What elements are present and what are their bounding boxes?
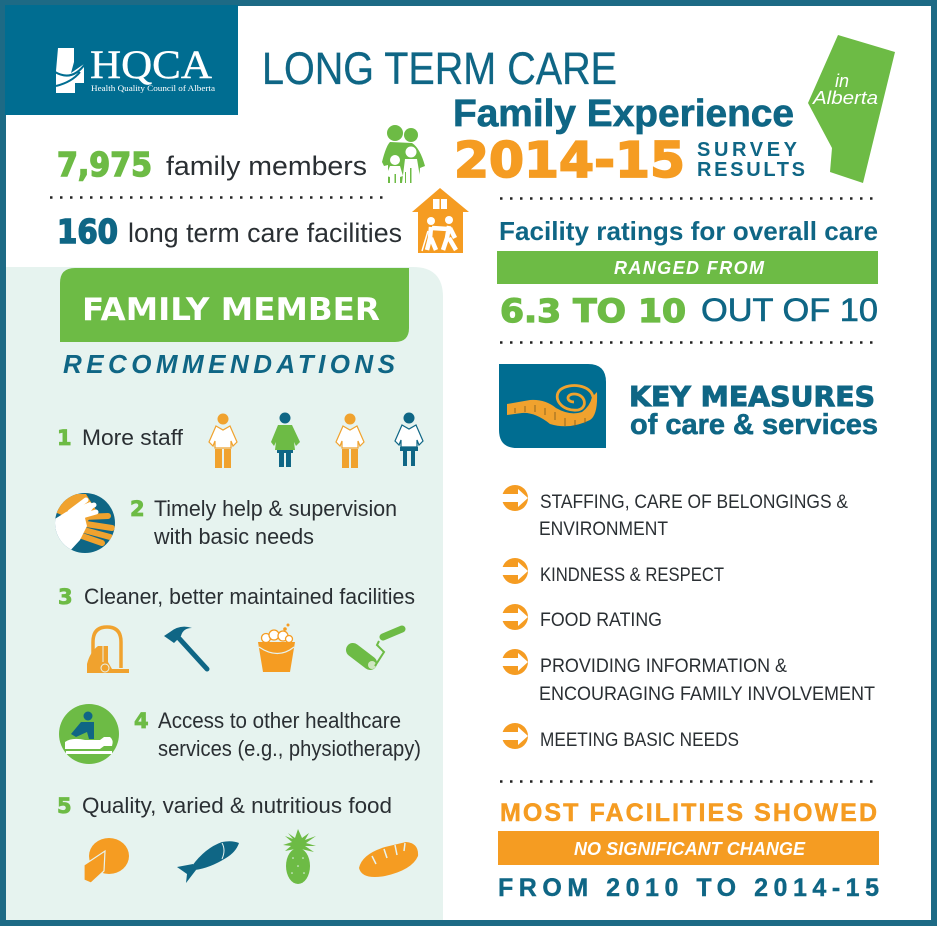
subtitle: Family Experience xyxy=(453,93,794,135)
icon: care home xyxy=(412,188,469,253)
title xyxy=(262,43,805,189)
recommendation 1: More staff xyxy=(82,425,184,450)
stat: rating range xyxy=(500,292,878,330)
heading: recommendations: RECOMMENDATIONS xyxy=(63,349,396,379)
recommendation 4 xyxy=(134,708,421,761)
panel: recommendations background xyxy=(6,267,443,920)
banner: ranged from: RANGED FROM xyxy=(614,258,765,278)
item: staffing xyxy=(502,485,848,540)
recommendation 3: 3 xyxy=(58,585,73,609)
stat: facilities: long term care facilities xyxy=(128,218,402,248)
banner: ranged from xyxy=(497,251,878,284)
banner: no significant change xyxy=(498,831,879,865)
item: food: FOOD RATING xyxy=(540,609,662,631)
logo wordmark: HQCA xyxy=(90,42,212,87)
recommendation 4: services (e.g., physiotherapy) xyxy=(158,736,421,761)
icon: Alberta map xyxy=(808,35,895,183)
heading: key measures xyxy=(629,380,878,441)
title: LONG TERM CARE xyxy=(262,43,617,94)
survey results: SURVEY xyxy=(697,139,798,161)
list: key measures xyxy=(502,485,875,751)
icon: helping hands xyxy=(50,493,115,553)
item: kindness xyxy=(502,558,724,586)
icon: hammer xyxy=(164,627,207,669)
icon: pineapple xyxy=(283,829,316,884)
icon: bread xyxy=(359,842,418,877)
heading: key measures: KEY MEASURES xyxy=(629,380,875,413)
icon: bucket xyxy=(258,624,295,672)
item: kindness: KINDNESS & RESPECT xyxy=(540,564,724,586)
icon: physiotherapy xyxy=(59,704,119,764)
footer text: period: FROM 2010 TO 2014-15 xyxy=(498,874,879,902)
heading: most facilities: MOST FACILITIES SHOWED xyxy=(500,799,877,827)
icon: Alberta map: Alberta xyxy=(812,88,878,108)
icon: fish xyxy=(177,841,239,883)
item: information xyxy=(502,649,875,705)
logo subtitle: Health Quality Council of Alberta xyxy=(91,83,215,93)
item: staffing: ENVIRONMENT xyxy=(539,518,668,540)
item: food xyxy=(502,604,662,631)
divider xyxy=(500,341,878,344)
icon: cheese xyxy=(84,838,129,883)
recommendation 1: 1 xyxy=(57,426,72,450)
recommendation 4: Access to other healthcare xyxy=(158,708,401,733)
banner: family member: FAMILY MEMBER xyxy=(82,292,380,328)
icon: Alberta logo mark xyxy=(55,48,85,93)
recommendation 2 xyxy=(130,496,397,549)
recommendation 5: 5 xyxy=(57,794,72,818)
stat: facilities xyxy=(57,212,402,251)
divider xyxy=(500,197,878,200)
title: RESULTS xyxy=(697,159,805,181)
recommendation 2: 2 xyxy=(130,497,145,521)
icon: paint roller xyxy=(353,629,402,669)
year: 2014-15 xyxy=(454,132,685,189)
item: basic needs xyxy=(502,723,739,751)
stat: facilities: 160 xyxy=(57,212,118,251)
icon: measuring tape xyxy=(499,364,606,448)
panel: logo block xyxy=(5,5,238,115)
stat: family members: family members xyxy=(166,151,367,181)
banner: no significant change: NO SIGNIFICANT CHANGE xyxy=(574,839,806,859)
item: basic needs: MEETING BASIC NEEDS xyxy=(540,729,739,751)
item: staffing: STAFFING, CARE OF BELONGINGS & xyxy=(540,491,848,513)
recommendation 3: Cleaner, better maintained facilities xyxy=(84,584,415,609)
icon: vacuum xyxy=(87,627,129,673)
banner: family member xyxy=(60,268,409,342)
icon: staff figures xyxy=(209,412,423,468)
icon: family xyxy=(382,125,425,183)
stat: rating range: OUT OF 10 xyxy=(701,292,878,328)
recommendation 4: 4 xyxy=(134,709,149,733)
divider xyxy=(50,196,386,199)
icon: Alberta map: in xyxy=(835,71,849,91)
recommendation 2: Timely help & supervision xyxy=(154,496,397,521)
recommendation 5: Quality, varied & nutritious food xyxy=(82,793,392,818)
heading: facility ratings: Facility ratings for overall care xyxy=(499,216,878,246)
recommendation 2: with basic needs xyxy=(153,524,314,549)
stat: family members xyxy=(57,145,367,184)
heading: key measures: of care & services xyxy=(630,409,878,441)
item: information: ENCOURAGING FAMILY INVOLVEMENT xyxy=(539,683,875,705)
item: information: PROVIDING INFORMATION & xyxy=(540,655,787,677)
stat: rating range: 6.3 TO 10 xyxy=(500,292,686,330)
divider xyxy=(500,780,878,783)
stat: family members: 7,975 xyxy=(57,145,152,184)
